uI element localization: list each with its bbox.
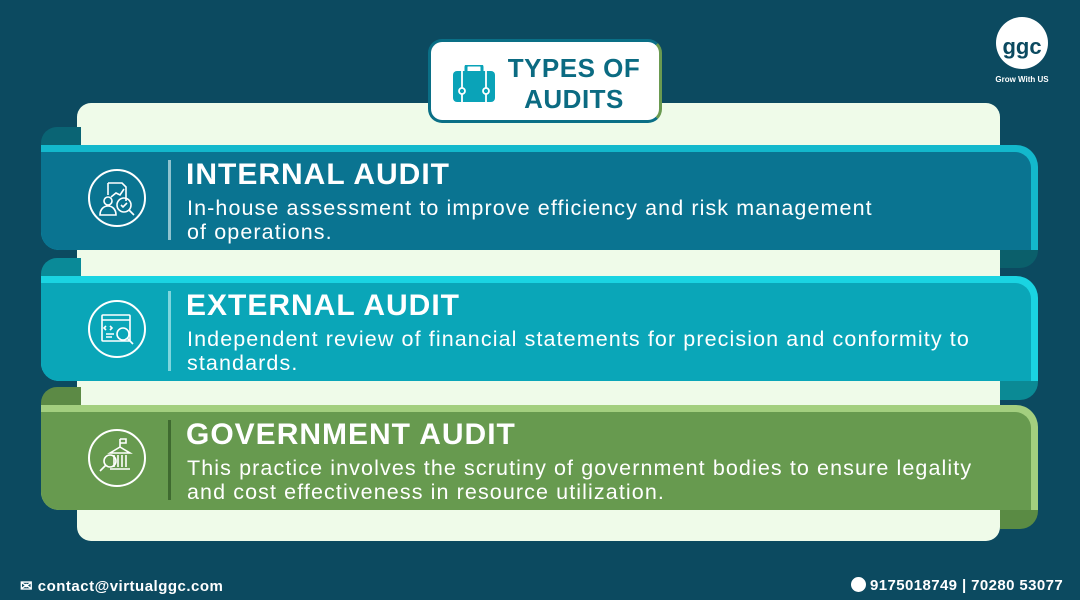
text: internal audit: of operations. bbox=[187, 220, 333, 244]
text: external audit bbox=[187, 327, 970, 375]
logo bbox=[995, 17, 1049, 84]
card background bbox=[77, 103, 1000, 541]
text: external audit: standards. bbox=[187, 351, 298, 375]
heading: internal audit: INTERNAL AUDIT bbox=[186, 158, 450, 191]
panel: internal audit bbox=[41, 127, 1038, 268]
heading: external audit: EXTERNAL AUDIT bbox=[186, 289, 460, 322]
title: TYPES OF bbox=[508, 53, 640, 83]
footer: email: ✉ contact@virtualggc.com bbox=[20, 578, 223, 595]
panel: external audit bbox=[41, 258, 1038, 400]
text: external audit: Independent review of financial statements for precision and conformity to bbox=[187, 327, 970, 351]
heading: government audit: GOVERNMENT AUDIT bbox=[186, 418, 516, 451]
title bbox=[428, 39, 662, 123]
text: government audit: This practice involves the scrutiny of government bodies to ensure legality bbox=[187, 456, 972, 480]
icon: internal audit bbox=[88, 169, 146, 227]
title: AUDITS bbox=[524, 84, 624, 114]
footer: phone: 9175018749 | 70280 53077 bbox=[870, 577, 1063, 594]
text: government audit bbox=[187, 456, 972, 504]
icon: government audit bbox=[88, 429, 146, 487]
text: internal audit: In-house assessment to improve efficiency and risk management bbox=[187, 196, 873, 220]
text: government audit: and cost effectiveness in resource utilization. bbox=[187, 480, 665, 504]
panel: government audit bbox=[41, 387, 1038, 529]
text: internal audit bbox=[187, 196, 873, 244]
logo: ggc bbox=[1002, 34, 1042, 59]
icon: briefcase bbox=[453, 65, 495, 102]
icon: external audit bbox=[88, 300, 146, 358]
logo: Grow With US bbox=[995, 75, 1049, 84]
